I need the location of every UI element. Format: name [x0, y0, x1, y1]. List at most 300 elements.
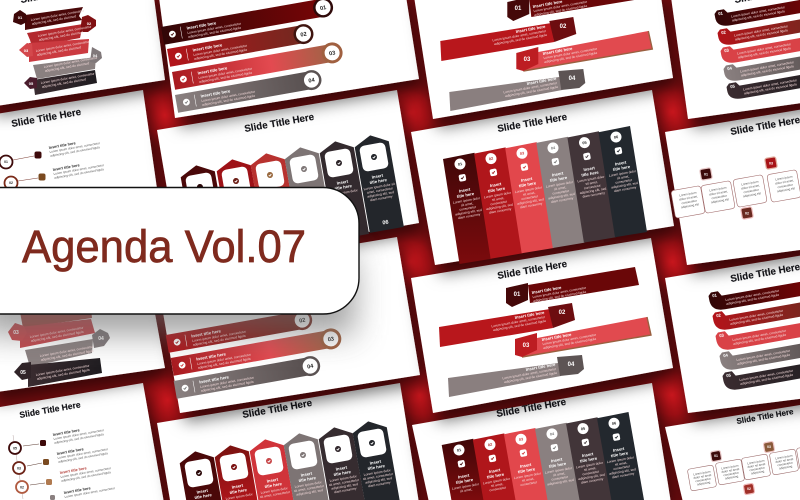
panel: bottom right process slide	[665, 405, 800, 500]
ribbon 03: adipiscing elit, sed do eiusmod ligula	[543, 337, 596, 350]
process box text	[693, 453, 795, 487]
ribbon 03: 03	[523, 343, 530, 349]
ribbon 03: Lorem ipsum dolor amet, consectetur	[542, 333, 597, 346]
tab 05: 05	[726, 372, 732, 378]
column 3: diam nonummy	[520, 202, 543, 209]
column 3	[504, 428, 548, 500]
hex column 2: title here	[229, 487, 248, 495]
column 6: 06	[612, 421, 617, 426]
tab 05: adipiscing elit, sed do eiusmod ligula	[740, 373, 793, 386]
timeline: 02	[20, 485, 24, 489]
panel: bottom centre-left hexagon columns slide	[157, 383, 418, 500]
column 5	[566, 417, 612, 500]
panel: middle-left ribbon slide lower part	[0, 232, 165, 393]
column 1: Insert	[458, 473, 470, 480]
column 5: 05	[582, 141, 587, 145]
tab 01: adipiscing elit, sed do eiusmod ligula	[732, 9, 785, 23]
tab 04: Lorem ipsum dolor amet, consectetur	[736, 348, 791, 362]
timeline: 02	[9, 181, 13, 185]
process box text: consectetur	[711, 194, 727, 200]
ribbon 03: 03	[524, 57, 531, 63]
bar 3: adipiscing elit, sed do eiusmod ligula	[197, 357, 251, 370]
hex column 4	[283, 144, 331, 231]
column 5: adipiscing elit, sed	[578, 473, 605, 481]
column 4: Lorem ipsum dolor	[546, 180, 574, 189]
tab 01: Lorem ipsum dolor amet, consectetur	[731, 5, 786, 19]
column 2: 02	[489, 157, 494, 161]
tab 03: 03	[719, 332, 725, 338]
timeline text: Insert title here	[56, 447, 84, 456]
tab 05	[726, 65, 800, 101]
ribbon 2: 02	[87, 21, 92, 26]
process box text: adipiscing	[751, 469, 765, 475]
banner shadow	[0, 255, 355, 335]
bar 2: Lorem ipsum dolor amet, consectetur	[192, 329, 247, 343]
panel: second row columns slide	[411, 90, 674, 265]
tab 04: Lorem ipsum dolor amet, consectetur	[740, 60, 795, 74]
hex column 1	[178, 448, 221, 500]
timeline text: Insert title here	[52, 428, 80, 437]
bar 4: Lorem ipsum dolor amet, consectetur	[201, 89, 256, 103]
timeline text: adipiscing elit, sed do eiusmod ligula	[58, 451, 108, 464]
process box text: Lorem ipsum	[693, 469, 711, 476]
hex column 6	[351, 418, 400, 500]
bar 2: adipiscing elit, sed do eiusmod ligula	[192, 334, 246, 347]
hex column 3	[249, 150, 297, 237]
column 6: title here	[612, 164, 631, 172]
column 1: title here	[455, 477, 474, 485]
bar 2: 02	[299, 318, 306, 325]
hex column 6: title here	[369, 177, 388, 185]
ribbon 2: adipiscing elit, sed do eiusmod	[38, 30, 84, 42]
tab 04: 04	[727, 65, 733, 71]
ribbon 01: adipiscing elit, sed do eiusmod ligula	[534, 4, 587, 17]
column 1: sit amet,	[460, 487, 473, 493]
hex column 6	[353, 132, 404, 233]
ribbon 2: Lorem ipsum dolor amet, consectetur	[37, 24, 93, 38]
column 3: 03	[519, 437, 524, 442]
column 1: Lorem ipsum dolor	[452, 482, 480, 491]
column 2: title here	[487, 186, 506, 194]
ribbon 3: adipiscing elit, sed do eiusmod ligula	[30, 330, 84, 343]
tab 01	[714, 0, 800, 28]
tab 02	[717, 11, 800, 47]
column 1: sit amet,	[461, 201, 474, 207]
column 3: adipiscing elit, sed	[517, 197, 544, 206]
ribbon 5	[24, 70, 97, 95]
ribbon 5: 05	[20, 370, 26, 376]
timeline text: Insert title here	[59, 466, 87, 475]
column 6: diam nonummy	[614, 185, 637, 193]
ribbon 03: adipiscing elit, sed do eiusmod ligula	[544, 51, 597, 64]
column 5: 05	[581, 427, 586, 431]
hex column 3: Insert	[266, 477, 279, 484]
panel: second row timeline slide	[0, 90, 165, 270]
process box text: dolor sit amet	[775, 457, 794, 464]
ribbon 01	[506, 267, 639, 307]
ribbon 02: Lorem ipsum dolor amet, consectetur	[492, 29, 547, 42]
hex column 5: title here	[333, 469, 352, 477]
column 5: consectetur	[584, 183, 602, 190]
process box text: dolor sit amet,	[679, 194, 698, 202]
ribbon 03: Lorem ipsum dolor amet, consectetur	[543, 47, 598, 60]
column 2: consectetur	[489, 485, 507, 492]
hex column 4: Lorem ipsum dolor	[294, 480, 323, 489]
timeline text: Lorem ipsum dolor amet, consectetur	[49, 141, 100, 154]
column 1: 01	[457, 448, 462, 453]
bar 3: 03	[329, 50, 336, 57]
column 3	[505, 142, 554, 253]
ribbon 02: 02	[559, 310, 566, 316]
bar 3: Lorem ipsum dolor amet, consectetur	[198, 66, 253, 80]
ribbon 4	[25, 329, 110, 367]
ribbon 5: adipiscing elit, sed do eiusmod	[41, 77, 87, 89]
title: Slide Title Here	[730, 262, 800, 285]
column 4: adipiscing elit, sed	[548, 192, 575, 200]
column 3: 03	[520, 151, 525, 156]
process box text: adipiscing elit	[681, 202, 699, 209]
hex column 4	[282, 430, 328, 500]
panel: bottom centre columns slide	[412, 383, 670, 500]
bar 2: Insert title here	[191, 328, 222, 339]
tab 03: Lorem ipsum dolor amet, consectetur	[732, 328, 787, 342]
panel: second row hexagon columns slide	[157, 90, 419, 265]
process box text: adipiscing	[779, 464, 793, 470]
ribbon 3: adipiscing elit, sed do eiusmod	[36, 45, 82, 57]
column 5: sit amet,	[585, 180, 598, 186]
panel: middle centre-left bars slide	[157, 237, 420, 413]
process box text: consectetur	[749, 466, 765, 472]
bar 1: Lorem ipsum dolor amet, consectetur	[187, 21, 242, 35]
hex column 6: Insert	[371, 173, 384, 180]
column 6: sit amet,	[617, 174, 630, 180]
bar 4: 04	[307, 363, 315, 371]
process box text: Lorem ipsum	[721, 463, 739, 470]
tab 01: 01	[718, 10, 724, 16]
tab 01: 01	[712, 292, 718, 298]
panel: middle right stacked tabs slide	[665, 254, 800, 413]
hex column 5: title here	[334, 183, 353, 191]
column 3: consectetur	[521, 194, 539, 201]
panel: bottom-left timeline slide	[0, 383, 164, 500]
bar 1: Insert title here	[186, 20, 217, 31]
title: Slide Title Here	[736, 407, 795, 426]
column 4	[535, 423, 580, 500]
column 5: consectetur	[582, 469, 600, 476]
ribbon 02	[439, 303, 575, 347]
column 1: 01	[458, 162, 463, 167]
process box text: dolor sit amet	[721, 467, 740, 474]
column 4: diam nonummy	[551, 196, 574, 204]
column 3: title here	[518, 180, 537, 188]
column 3: Lorem ipsum dolor	[514, 471, 542, 480]
column 2: Insert	[490, 181, 502, 188]
column 6: sit amet,	[615, 461, 628, 467]
timeline text: adipiscing elit, sed do eiusmod ligula	[54, 432, 104, 445]
timeline text: Lorem ipsum dolor amet, consectetur	[60, 466, 111, 479]
ribbon 5	[14, 358, 102, 387]
hex column 4: Insert	[300, 471, 313, 478]
bar 4: adipiscing elit, sed do eiusmod ligula	[202, 94, 255, 107]
process box text: Lorem ipsum	[775, 453, 793, 460]
hex column 6: 06	[382, 219, 389, 226]
hex column 2	[213, 442, 257, 500]
column 6: adipiscing elit, sed	[609, 467, 636, 476]
tab 04: adipiscing elit, sed do eiusmod ligula	[737, 353, 790, 366]
tab 02: adipiscing elit, sed do eiusmod ligula	[735, 28, 788, 42]
column 2: diam nonummy	[489, 207, 512, 215]
title: Slide Title Here	[242, 398, 314, 421]
tab 02: 02	[716, 312, 722, 318]
tab 03: 03	[724, 47, 730, 53]
process box text: consectetur	[723, 471, 739, 477]
tab 02: Lorem ipsum dolor amet, consectetur	[734, 24, 789, 38]
column 4: Insert	[551, 456, 563, 463]
column 1: Lorem ipsum dolor	[453, 196, 481, 205]
ribbon 03	[515, 317, 651, 357]
column 1: Insert	[459, 187, 471, 194]
timeline text: Insert title here	[63, 486, 91, 495]
ribbon 01: Lorem ipsum dolor amet, consectetur	[533, 0, 588, 13]
hex column 1: Insert	[196, 488, 209, 495]
hex column 4: title here	[298, 475, 317, 483]
bar 3: Insert title here	[196, 351, 227, 362]
column 4: adipiscing elit, sed	[547, 478, 574, 486]
column 2: Lorem ipsum dolor	[484, 191, 512, 199]
ribbon 01: 01	[514, 292, 521, 298]
column 4	[536, 137, 585, 248]
bar 1	[161, 0, 335, 46]
ribbon 1: adipiscing elit, sed do eiusmod	[31, 14, 77, 26]
ribbon 3	[19, 39, 91, 62]
timeline text: Lorem ipsum dolor amet, consectetur	[53, 163, 104, 176]
bar 1: 01	[320, 5, 327, 12]
process box text: Lorem ipsum	[709, 185, 727, 192]
column 5: Lorem ipsum dolor	[576, 461, 604, 469]
panel: top centre-left bars slide	[158, 0, 419, 118]
ribbon 04: 04	[569, 76, 576, 82]
ribbon 3: Lorem ipsum dolor amet, consectetur	[29, 325, 85, 339]
ribbon 01: Lorem ipsum dolor amet, consectetur	[532, 286, 587, 299]
ribbon 3: 03	[13, 330, 19, 336]
ribbon 4: 04	[93, 53, 98, 58]
ribbon 4	[33, 47, 102, 79]
title: Slide Title Here	[244, 112, 316, 135]
timeline text: Lorem ipsum dolor amet, consectetur	[57, 447, 108, 460]
column 5: title here	[581, 170, 600, 178]
hex column 2	[215, 156, 263, 243]
timeline text	[48, 137, 105, 180]
column 2: 02	[488, 443, 493, 447]
ribbon 03: Insert title here	[541, 332, 572, 342]
tab 05: adipiscing elit, sed do eiusmod ligula	[744, 82, 797, 96]
column 4: 04	[550, 432, 555, 437]
tab 03	[720, 29, 800, 65]
ribbon 04: 04	[568, 362, 575, 368]
hex column 3: Lorem ipsum dolor	[260, 486, 289, 495]
hex column 5: Lorem ipsum dolor	[330, 188, 359, 197]
timeline text: adipiscing elit, sed do eiusmod ligula	[54, 167, 104, 180]
hex column 1	[179, 162, 227, 249]
ribbon 03	[516, 31, 652, 71]
ribbon 01	[507, 0, 640, 21]
ribbon 2	[27, 15, 96, 47]
banner	[0, 188, 359, 314]
column 6: title here	[610, 450, 629, 458]
column 3: Lorem ipsum dolor	[515, 185, 543, 194]
timeline: 01	[4, 160, 8, 164]
hex column 6: title here	[367, 463, 386, 471]
process box text: Lorem ipsum	[747, 458, 765, 465]
bar 1: adipiscing elit, sed do eiusmod ligula	[188, 26, 241, 39]
hex column 5	[318, 138, 369, 240]
column 2: adipiscing elit, sed	[486, 203, 513, 211]
hex column 4: adipiscing elit, sed	[296, 488, 323, 497]
column 5: diam nonummy	[581, 477, 604, 485]
column 3: sit amet,	[523, 191, 536, 197]
panel: second row right process slide	[665, 108, 800, 265]
ribbon 5: 05	[29, 81, 34, 86]
hex column 1: title here	[194, 492, 213, 500]
tab 02	[712, 294, 800, 332]
column 2	[473, 433, 516, 500]
process boxes	[687, 444, 800, 491]
tab 03: adipiscing elit, sed do eiusmod ligula	[733, 333, 786, 346]
hex column 6: diam nonummy	[368, 480, 391, 488]
column 4: Insert	[552, 170, 564, 177]
column 1: adipiscing elit, sed	[455, 208, 482, 217]
hex column 5: Insert	[335, 465, 348, 472]
ribbon 2	[20, 300, 92, 328]
ribbon 02: Lorem ipsum dolor amet, consectetur	[491, 315, 546, 328]
process box text: adipiscing elit	[743, 191, 761, 198]
column 2: sit amet,	[492, 196, 505, 202]
process box text: Lorem ipsum	[679, 190, 697, 197]
title: Slide Title Here	[11, 107, 83, 130]
panel: top-left ribbon slide	[0, 0, 165, 107]
column 3: consectetur	[520, 480, 538, 487]
column 5: adipiscing elit, sed	[579, 187, 607, 195]
column 2: Insert	[489, 467, 501, 474]
ribbon 02: 02	[560, 24, 567, 30]
process box text: consectetur	[743, 188, 759, 194]
tab 03: adipiscing elit, sed do eiusmod ligula	[738, 46, 791, 60]
process box text: consectetur	[777, 183, 793, 189]
ribbon 02: Insert title here	[515, 24, 546, 34]
ribbon 04: adipiscing elit, sed do eiusmod ligula	[504, 371, 557, 384]
tab 01	[708, 274, 800, 312]
column 4: 04	[551, 146, 556, 151]
tab 02: adipiscing elit, sed do eiusmod ligula	[730, 313, 783, 326]
process badges	[710, 441, 775, 495]
hex column 3: sit amet, consectetur	[260, 490, 291, 499]
process box text: consectetur	[695, 477, 711, 483]
process box text: dolor sit amet,	[709, 189, 728, 197]
bar 4: 04	[308, 77, 316, 85]
timeline	[9, 435, 55, 500]
ribbon 1: 01	[18, 15, 23, 20]
panel: middle centre ribbons slide	[411, 238, 673, 413]
hex column 3	[248, 436, 293, 500]
ribbon 4: adipiscing elit, sed do eiusmod ligula	[40, 349, 94, 362]
bar 4: Insert title here	[199, 374, 230, 385]
title: Slide Title Here	[497, 112, 569, 135]
bar 3: adipiscing elit, sed do eiusmod ligula	[199, 71, 252, 84]
column 4: sit amet,	[553, 471, 566, 477]
ribbon 04: Insert title here	[526, 76, 557, 86]
process badges: 03	[769, 161, 773, 165]
column 5: Insert	[582, 451, 594, 458]
bar 3: 03	[327, 336, 335, 343]
hex column 4: sit amet, consectetur	[294, 484, 325, 493]
title: Slide Title Here	[730, 115, 800, 138]
bar 2: 02	[300, 32, 307, 39]
process badges: 02	[745, 211, 749, 215]
process boxes	[671, 170, 800, 218]
column 5: Lorem ipsum dolor	[577, 175, 606, 183]
tab 03	[715, 314, 800, 352]
ribbon 4: adipiscing elit, sed do eiusmod	[44, 61, 90, 73]
column 1: diam nonummy	[458, 212, 481, 220]
column 1: title here	[456, 191, 475, 199]
bar 3: Insert title here	[197, 65, 228, 76]
column 4: Lorem ipsum dolor	[545, 466, 573, 475]
bar 4: Insert title here	[200, 88, 231, 99]
timeline text: Insert title here	[52, 163, 80, 172]
column 5: title here	[579, 456, 598, 464]
ribbon 02: adipiscing elit, sed do eiusmod ligula	[494, 33, 547, 46]
tab 01: adipiscing elit, sed do eiusmod ligula	[726, 293, 779, 306]
column 3: title here	[517, 466, 536, 474]
ribbon 3: 03	[24, 48, 29, 53]
timeline text: adipiscing elit, sed do eiusmod ligula	[61, 470, 111, 483]
column 1	[442, 439, 484, 500]
ribbon 02: adipiscing elit, sed do eiusmod ligula	[493, 319, 546, 332]
hex column 5: sit amet, consectetur	[329, 478, 360, 487]
ribbon 5: Lorem ipsum dolor amet, consectetur	[40, 71, 96, 85]
process badges: 02	[747, 487, 751, 491]
tab 04	[723, 47, 800, 83]
column 1	[443, 153, 492, 264]
process box text: adipiscing	[697, 480, 711, 486]
process box text: adipiscing elit	[711, 197, 729, 204]
tab 05: 05	[730, 83, 736, 89]
tab 04: 04	[723, 352, 729, 358]
hex column 6: diam nonummy	[370, 194, 393, 202]
ribbon 04: Insert title here	[525, 362, 556, 372]
column 4: consectetur	[552, 189, 570, 196]
ribbon 04	[449, 69, 585, 111]
ribbon 3	[8, 319, 95, 348]
title: Slide Title Here	[496, 397, 568, 420]
bar 3: Lorem ipsum dolor amet, consectetur	[197, 352, 252, 366]
process box text: dolor sit amet,	[741, 183, 760, 191]
column 2: title here	[486, 472, 505, 480]
hex column 6: Lorem ipsum dolor sit	[363, 182, 395, 191]
timeline	[0, 152, 46, 190]
process box text: Lorem ipsum	[775, 174, 793, 181]
ribbon 4: 04	[98, 336, 104, 342]
tab 03: Lorem ipsum dolor amet, consectetur	[737, 42, 792, 56]
column 6	[598, 126, 647, 237]
tab 05	[722, 354, 800, 392]
bar 2	[166, 308, 314, 354]
timeline: 05	[13, 446, 17, 450]
process badges	[700, 157, 777, 219]
column 6: consectetur	[613, 464, 631, 471]
hex column 5: Insert	[336, 179, 349, 186]
process badges: 01	[714, 454, 718, 458]
